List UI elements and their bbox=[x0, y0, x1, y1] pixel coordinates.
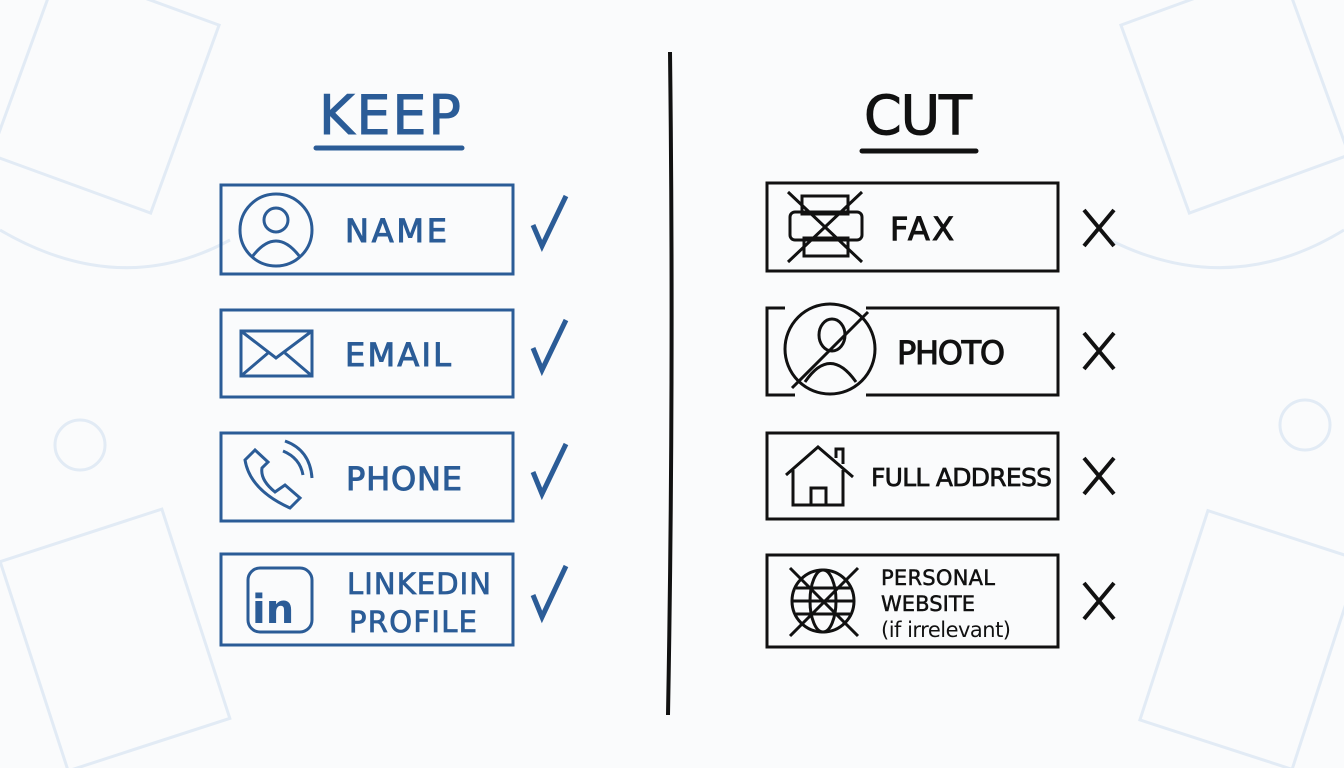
panel: cut items bbox=[767, 183, 1114, 647]
item: email: EMAIL bbox=[345, 336, 451, 374]
item: full address bbox=[767, 433, 1114, 519]
title: KEEP: KEEP bbox=[319, 84, 461, 147]
item: fax bbox=[767, 183, 1114, 271]
item: full address: FULL ADDRESS bbox=[871, 463, 1052, 492]
item: personal website: WEBSITE bbox=[881, 592, 975, 616]
item: linkedin: LINKEDIN bbox=[347, 567, 491, 601]
item: linkedin bbox=[221, 554, 566, 645]
item: linkedin: PROFILE bbox=[349, 605, 477, 639]
item: fax: FAX bbox=[890, 210, 954, 248]
divider line bbox=[668, 52, 672, 715]
item: email bbox=[221, 310, 566, 397]
item: photo bbox=[767, 304, 1114, 395]
item: personal website bbox=[767, 555, 1114, 647]
panel: keep items bbox=[221, 185, 566, 645]
item: personal website: PERSONAL bbox=[881, 566, 995, 590]
item: linkedin: in bbox=[252, 587, 294, 633]
item: personal website: (if irrelevant) bbox=[881, 618, 1011, 642]
title: CUT: CUT bbox=[864, 84, 973, 147]
item: phone: PHONE bbox=[346, 460, 462, 498]
item: phone bbox=[221, 433, 566, 521]
item: photo: PHOTO bbox=[897, 334, 1005, 372]
item: name: NAME bbox=[345, 212, 447, 250]
item: name bbox=[221, 185, 566, 274]
